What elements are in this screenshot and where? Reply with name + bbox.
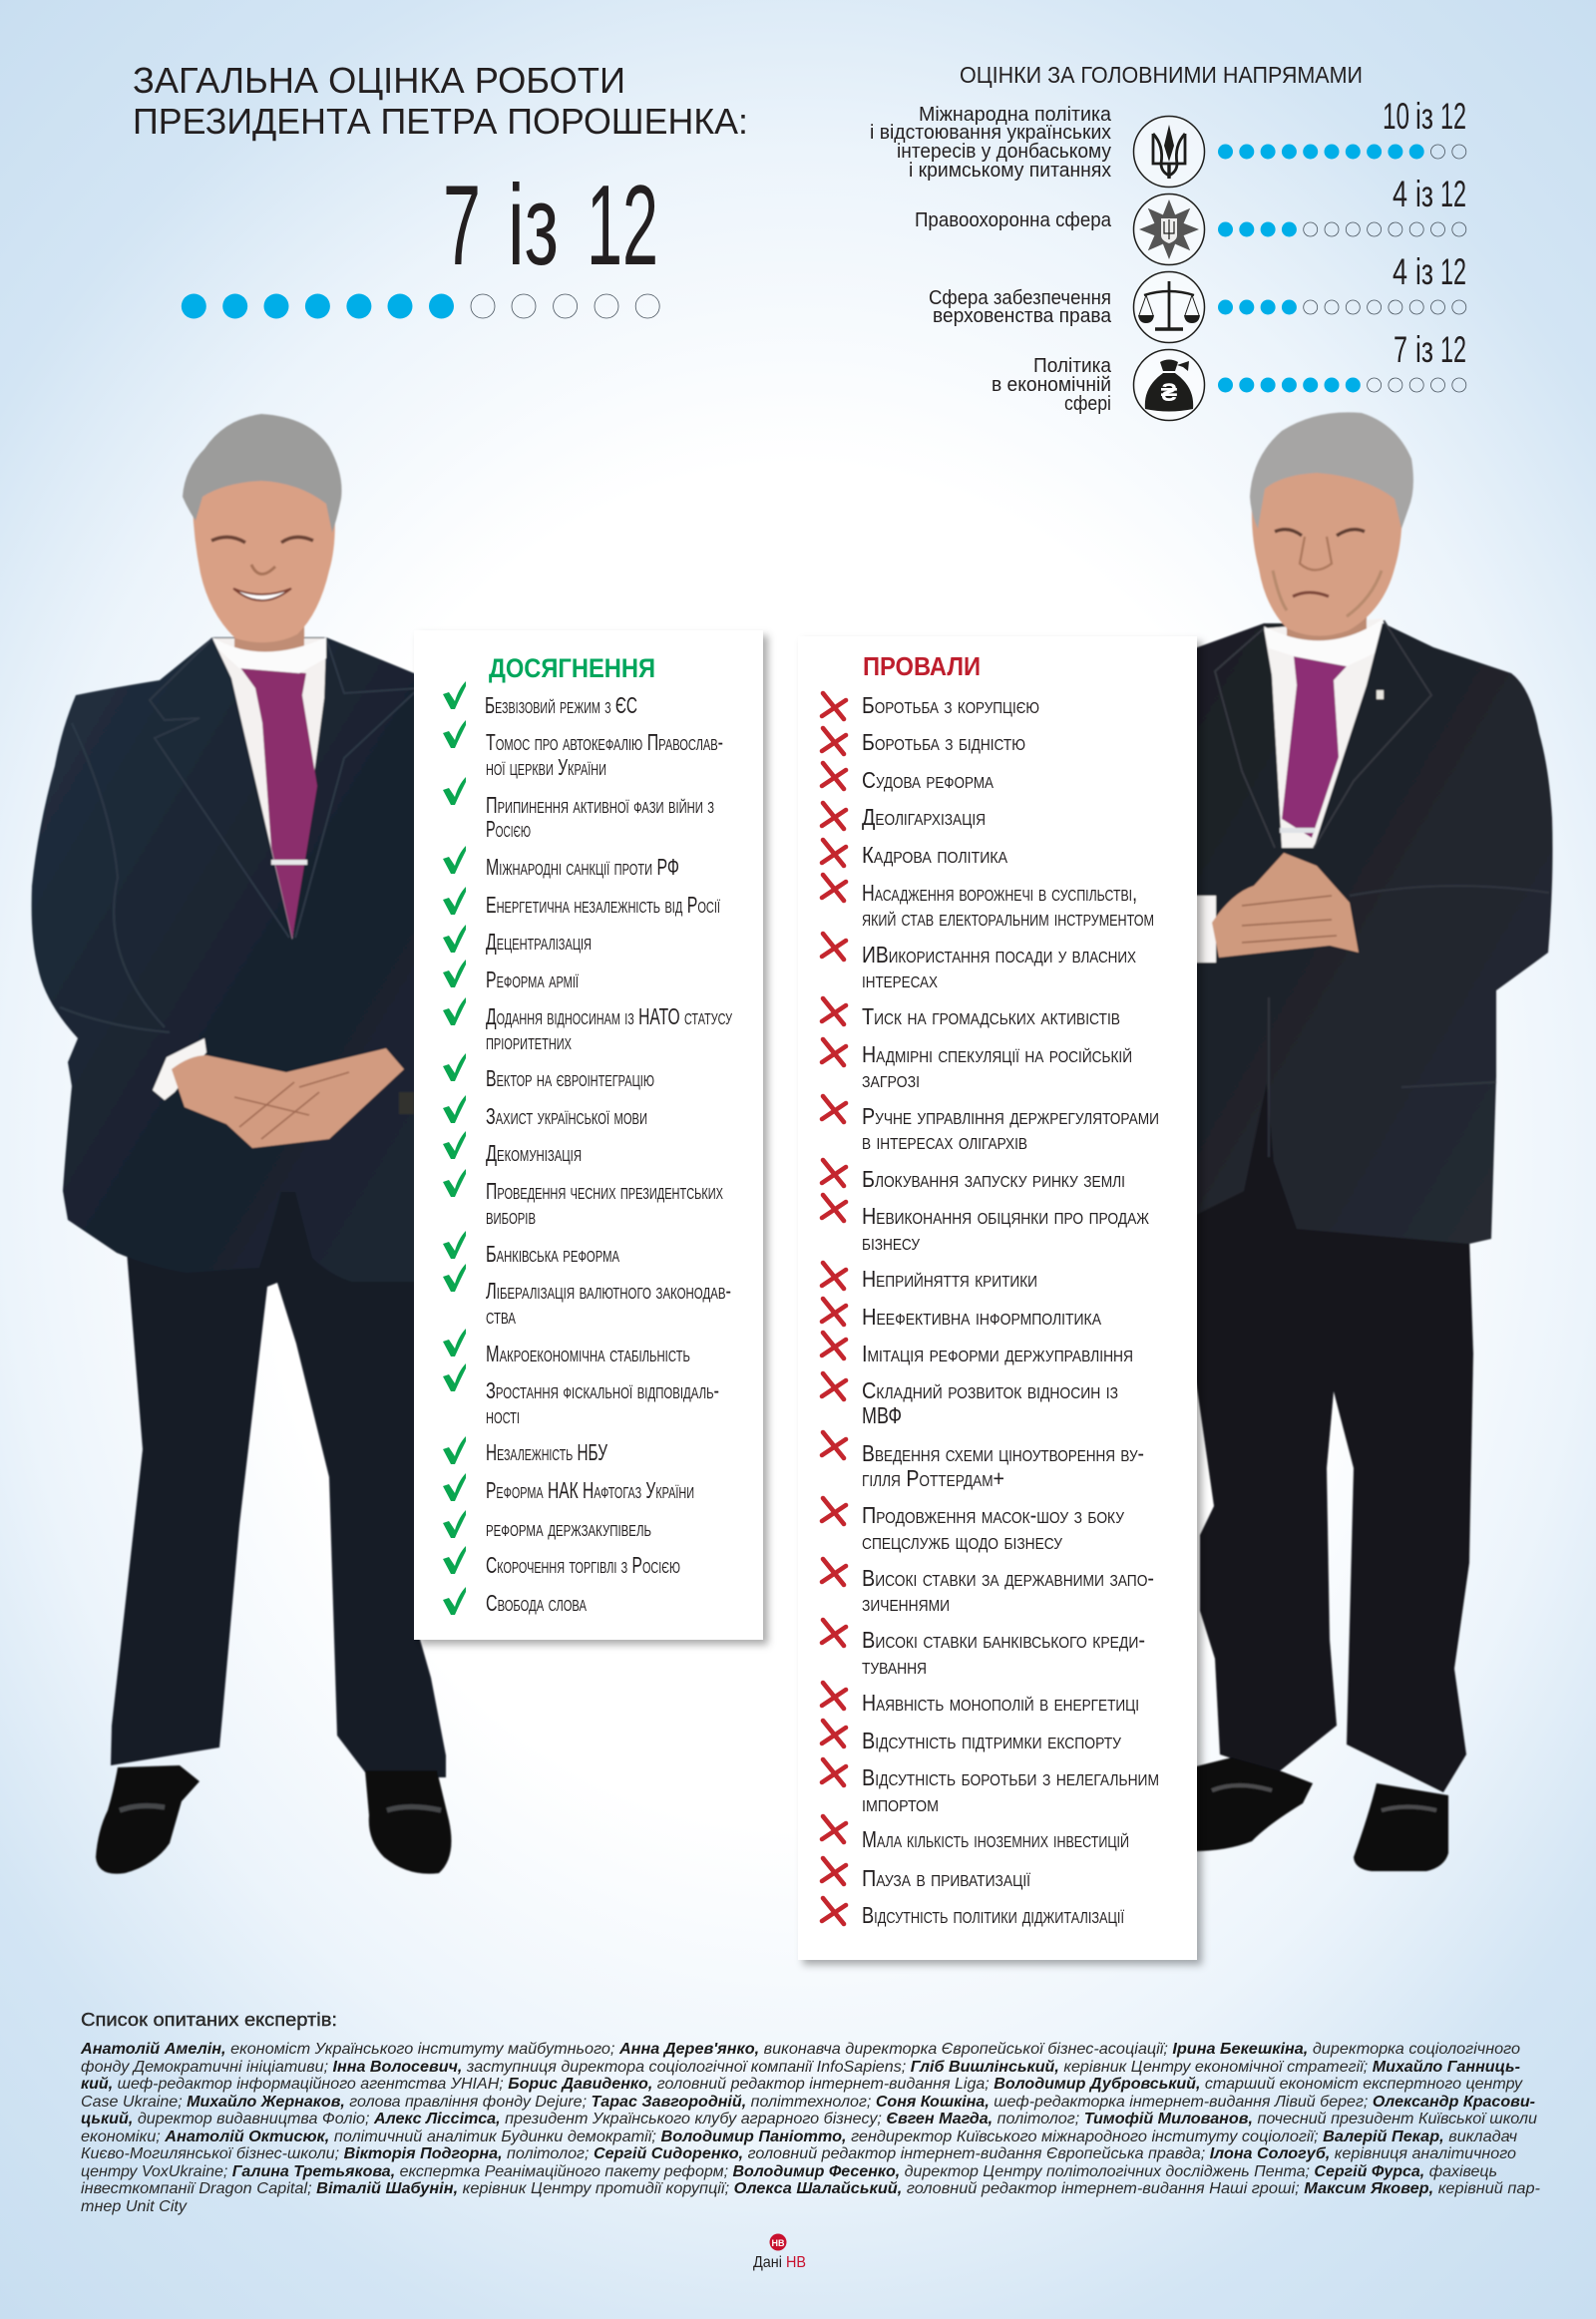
item: macro stability: Макроекономічна стабільність [486,1341,690,1366]
heading: ratings by direction: ОЦІНКИ ЗА ГОЛОВНИМИ НАПРЯМАМИ [960,62,1363,88]
hands [172,1048,404,1148]
item: export support: Відсутність підтримки експорту [862,1728,1122,1753]
item: language protection: Захист української мови [486,1103,647,1129]
text block: experts list [80,2041,1540,2215]
item: rejecting criticism [822,1263,1037,1292]
score: 4 of 12: 4 [1393,251,1407,292]
cuff [1192,896,1216,963]
item: illegal imports: імпортом [862,1790,939,1816]
item: state borrowing rates: зиченнями [862,1590,950,1616]
overall score: 7 of 12: із [508,163,559,289]
hands [1212,853,1359,958]
item: mask shows [822,1498,1125,1554]
item: energy monopolies [822,1683,1139,1716]
item: eurointegration [443,1053,654,1091]
rating row: rule of law [929,251,1466,343]
item: manual control of regulators: Ручне управління держрегуляторами [862,1103,1159,1129]
tie [239,666,317,939]
item: information policy: Неефективна інформполітика [862,1304,1101,1330]
item: Russian threat speculation: Надмірні спекуляції на російській [862,1041,1132,1067]
shirt [1264,618,1384,848]
heading: failures: ПРОВАЛИ [863,651,981,681]
hair [1250,412,1413,529]
item: inciting hostility: який став електоральним інструментом [862,905,1154,931]
dots: 10 of 12 [1218,144,1466,160]
text block: experts list: Case Ukraine; Михайло Жернаков, голова правління фонду Dejure; Тарас Завгородній, політтехнолог; Соня Кошкіна, шеф-редакторка інтернет-видання Лівий берег; Олександр Красови- [81,2094,1535,2111]
item: decommunization [443,1131,582,1166]
item: illegal imports [822,1759,1159,1816]
label: rule of law [929,287,1112,327]
item: manual control of regulators [822,1096,1159,1154]
label: economic policy: сфері [1064,393,1111,415]
item: fiscal responsibility: ності [486,1402,520,1428]
title: ЗАГАЛЬНА ОЦІНКА РОБОТИ [133,60,625,101]
item: trade with Russia: Скорочення торгівлі з Росією [486,1552,680,1578]
item: judicial reform [822,763,994,793]
rating row: international policy [870,96,1466,188]
item: bank lending rates: Високі ставки банківського креди- [862,1627,1145,1653]
text block: experts list: кий, шеф-редактор інформаційного агентства УНІАН; Борис Давиденко, головний редактор інтернет-видання Liga; Володимир Дубровський, старший економіст експертного центру [81,2076,1523,2093]
heading: achievements: ДОСЯГНЕННЯ [489,653,655,683]
label: international policy: і кримському питаннях [909,160,1111,182]
label: rule of law: верховенства права [933,305,1112,327]
item: business sale promise: бізнесу [862,1229,921,1255]
dots: 4 of 12 [1218,299,1466,315]
label: law enforcement: Правоохоронна сфера [915,209,1112,231]
item: digitalization: Відсутність політики діджиталізації [862,1902,1124,1928]
overall score: 7 of 12: 12 [587,163,658,289]
icon: scales [1133,271,1205,343]
item: public admin reform: Імітація реформи держуправління [862,1341,1133,1366]
label: international policy: інтересів у донбаському [897,141,1111,163]
item: deoligarchization [822,803,986,830]
figure: stern president (right) [1192,412,1552,1871]
item: end of active war: Росією [486,816,531,842]
item: Naftogaz reform: Реформа НАК Нафтогаз України [486,1477,694,1503]
text block: experts list: центру VoxUkraine; Галина Третьякова, експертка Реанімаційного пакету реформ; Володимир Фесенко, директор Центру політологічних досліджень Пента; Сергій Фурса, фахівець [81,2163,1497,2180]
item: mask shows: спецслужб щодо бізнесу [862,1528,1063,1554]
left shoe [96,1765,200,1874]
item: visa-free [443,681,637,718]
shirt [212,638,326,940]
text block: experts list: цький, директор видавництва Фоліо; Алекс Ліссітса, президент Українського клубу аграрного бізнесу; Євген Магда, політолог; Тимофій Милованов, почесний президент Київської школи [81,2111,1537,2127]
item: free speech [443,1587,587,1616]
item: corruption [822,692,1039,719]
item: NATO priority [443,997,733,1054]
item: pressure on activists: Тиск на громадських активістів [862,1003,1120,1029]
item: tomos: Томос про автокефалію Православ- [486,729,723,755]
text block: experts list: Анатолій Амелін, економіст Українського інституту майбутнього; Анна Дерев'янко, виконавча директорка Європейської бізнес-асоціації; Ірина Бекешкіна, директорка соціологічного [80,2041,1520,2058]
item: land market [822,1160,1125,1192]
dots: 4 of 12 [1218,221,1466,237]
item: abuse of office [822,934,1136,992]
item: energy monopolies: Наявність монополій в енергетиці [862,1690,1139,1716]
trousers [1192,997,1476,1792]
text block: experts list: тнер Unit City [81,2198,188,2215]
icon: money bag: ₴ [1161,379,1178,407]
item: procurement reform: реформа держзакупівель [486,1515,651,1541]
item: abuse of office: інтересах [862,966,938,992]
item: free speech: Свобода слова [486,1590,587,1616]
panel background [798,636,1197,1960]
trousers [111,1127,446,1777]
item: Rotterdam+: Введення схеми ціноутворення ву- [862,1440,1144,1466]
item: rejecting criticism: Неприйняття критики [862,1266,1037,1292]
text block: experts list: фонду Демократичні ініціативи; Інна Волосевич, заступниця директора соціологічної компанії InfoSapiens; Гліб Вишлінський, керівник Центру економічної стратегії; Михайло Ганниць- [81,2059,1520,2076]
overall score: 7 of 12: 7 [443,163,481,289]
item: army reform: Реформа армії [486,966,579,992]
score: 7 of 12: із [1415,329,1433,370]
item: poverty [822,728,1025,755]
item: inciting hostility: Насадження ворожнечі в суспільстві, [862,880,1137,906]
dots: 7 of 12 [1218,377,1466,393]
panel: achievements [414,630,763,1640]
item: IMF relations: МВФ [862,1402,902,1428]
jacket [1192,623,1552,1244]
text block: experts list: економіки; Анатолій Октисюк, політичний аналітик Будинки демократії; Володимир Паніотто, гендиректор Київського міжнародного інституту соціології; Валерій Пекар, викладач [81,2128,1517,2145]
score: 7 of 12: 7 [1394,329,1407,370]
source credit: Дані НВ [753,2254,806,2271]
item: foreign investment [822,1816,1129,1852]
item: Russian threat speculation [822,1039,1132,1092]
item: pressure on activists [822,998,1120,1029]
score: 4 of 12: із [1415,174,1433,214]
item: poverty: Боротьба з бідністю [862,729,1025,755]
figure: smiling president (left) [32,414,451,1874]
item: manual control of regulators: в інтересах олігархів [862,1128,1027,1154]
item: decentralization: Децентралізація [486,929,592,955]
item: state borrowing rates: Високі ставки за державними запо- [862,1565,1154,1591]
cuff [153,1038,206,1100]
collar [212,637,326,673]
item: NATO priority: пріоритетних [486,1028,572,1054]
item: fair elections [443,1169,723,1229]
left shoe [1192,1757,1313,1851]
tie [1282,656,1347,838]
label: rule of law: Сфера забезпечення [929,287,1111,309]
right shoe [1354,1783,1448,1871]
neck [1287,608,1367,653]
icon: police star [1133,193,1205,265]
score: 10 of 12: 12 [1440,96,1466,137]
item: NBU independence: Незалежність НБУ [486,1439,607,1465]
score: 4 of 12: із [1415,251,1433,292]
item: judicial reform: Судова реформа [862,767,994,793]
lapels [150,638,419,938]
item: decentralization [443,925,592,955]
lapels [1215,620,1431,848]
item: land market: Блокування запуску ринку землі [862,1166,1125,1192]
item: Rotterdam+: гілля Роттердам+ [862,1465,1004,1491]
item: trade with Russia [443,1546,680,1578]
item: sanctions: Міжнародні санкції проти РФ [486,854,679,880]
item: information policy [822,1299,1101,1330]
item: mask shows: Продовження масок-шоу з боку [862,1502,1125,1528]
score: 4 of 12: 12 [1440,251,1466,292]
face [1252,469,1401,636]
item: fair elections: Проведення чесних президентських [486,1178,723,1204]
score: 4 of 12: 4 [1393,174,1407,214]
item: tomos [443,720,723,780]
item: Naftogaz reform [443,1473,694,1503]
title: ПРЕЗИДЕНТА ПЕТРА ПОРОШЕНКА: [133,101,748,142]
right shoe [365,1770,451,1874]
item: privatization: Пауза в приватизації [862,1865,1030,1891]
item: abuse of office: ИВикористання посади у власних [862,942,1136,967]
item: NBU independence [443,1436,607,1465]
item: business sale promise: Невиконання обіцянки про продаж [862,1203,1149,1229]
item: inciting hostility [822,875,1154,931]
item: bank lending rates [822,1620,1145,1679]
panel: failures [798,636,1197,1960]
item: fiscal responsibility: Зростання фіскальної відповідаль- [486,1377,719,1403]
item: personnel policy: Кадрова політика [862,842,1007,868]
item: banking reform: Банківська реформа [486,1241,619,1267]
item: decommunization: Декомунізація [486,1140,582,1166]
icon: money bag [1133,349,1205,421]
rating row: law enforcement [915,174,1466,265]
item: public admin reform [822,1333,1133,1366]
rating row: economic policy [992,329,1466,421]
score: 7 of 12: 12 [1440,329,1466,370]
item: IMF relations: Складний розвиток відносин із [862,1377,1118,1403]
item: fair elections: виборів [486,1203,536,1229]
item: sanctions [443,846,679,880]
item: currency liberalization: Лібералізація валютного законодав- [486,1278,731,1304]
icon: NV logo [770,2234,786,2250]
item: currency liberalization [443,1264,731,1329]
item: fiscal responsibility [443,1363,719,1428]
neck [234,618,304,666]
item: foreign investment: Мала кількість іноземних інвестицій [862,1826,1129,1852]
item: export support [822,1721,1122,1753]
item: end of active war: Припинення активної фази війни з [486,792,714,818]
item: digitalization [822,1898,1124,1928]
item: energy independence [443,887,720,918]
item: macro stability [443,1329,690,1366]
item: end of active war [443,777,714,842]
item: language protection [443,1095,647,1129]
item: privatization [822,1858,1030,1891]
hair [183,414,341,533]
face [193,477,335,642]
item: eurointegration: Вектор на євроінтеграцію [486,1065,654,1091]
item: Rotterdam+ [822,1432,1144,1491]
label: international policy: і відстоювання українських [870,122,1111,144]
panel background [414,630,763,1640]
item: Russian threat speculation: загрозі [862,1066,920,1092]
score: 10 of 12: 10 [1383,96,1409,137]
text block: experts list: Києво-Могилянської бізнес-школи; Вікторія Подгорна, політолог; Сергій Сидоренко, головний редактор інтернет-видання Європейська правда; Ілона Сологуб, керівниця аналітичного [81,2145,1516,2162]
text block: experts list: інвесткомпанії Dragon Capital; Віталій Шабунін, керівник Центру протидії корупції; Олекса Шалайський, головний редактор інтернет-видання Наші гроші; Максим Яковер, керівний пар- [81,2180,1540,2197]
item: personnel policy [822,840,1007,868]
item: procurement reform [443,1510,651,1541]
score: 10 of 12: із [1415,96,1433,137]
overall score dots [182,293,659,319]
item: visa-free: Безвізовий режим з ЄС [485,692,637,718]
label: economic policy: Політика [1033,355,1112,377]
item: deoligarchization: Деолігархізація [862,804,986,830]
item: NATO priority: Додання відносинам із НАТО статусу [486,1003,733,1029]
item: state borrowing rates [822,1559,1154,1616]
item: banking reform [443,1231,619,1267]
score: 4 of 12: 12 [1440,174,1466,214]
item: army reform [443,960,579,992]
icon: NV logo: НВ [772,2238,785,2248]
item: corruption: Боротьба з корупцією [862,692,1039,718]
item: business sale promise [822,1195,1149,1255]
collar [1264,618,1384,666]
label: economic policy: в економічній [992,374,1111,396]
item: IMF relations [822,1373,1118,1428]
item: tomos: ної церкви України [486,754,606,780]
title [133,60,748,142]
label: international policy [870,104,1112,182]
item: illegal imports: Відсутність боротьби з нелегальним [862,1764,1159,1790]
item: bank lending rates: тування [862,1653,927,1679]
jacket [32,637,419,1282]
item: currency liberalization: ства [486,1303,516,1329]
icon: trident [1133,116,1205,188]
item: energy independence: Енергетична незалежність від Росії [486,892,720,918]
heading: list of experts: Список опитаних експертів: [81,2010,337,2030]
pin [1377,690,1384,699]
label: economic policy [992,355,1112,415]
label: international policy: Міжнародна політика [919,104,1112,126]
